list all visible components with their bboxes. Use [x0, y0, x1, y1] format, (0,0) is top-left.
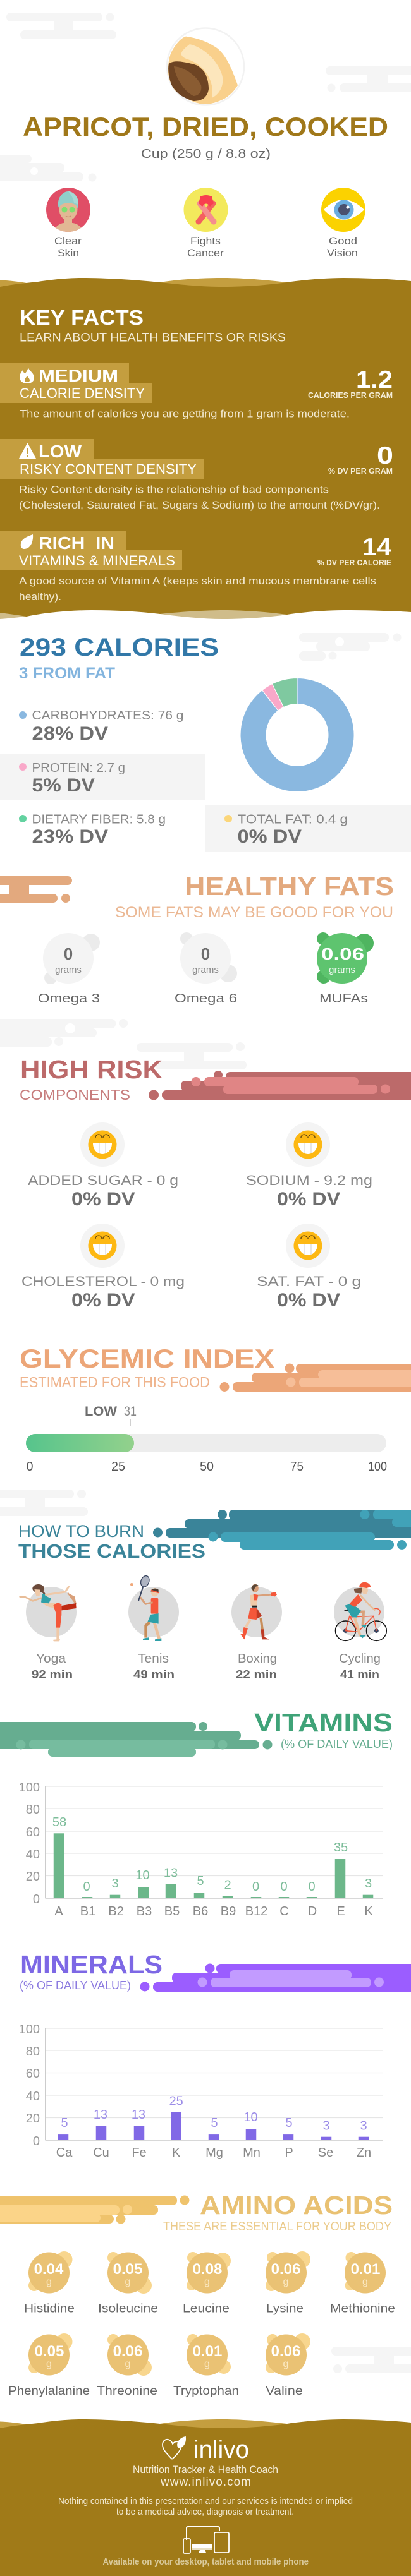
bar chart: vitamins: E — [336, 1905, 345, 1918]
fact: medium calorie density: CALORIE DENSITY — [20, 385, 145, 401]
bar chart: vitamins: B5 — [164, 1905, 180, 1918]
gauge axis: 0 — [27, 1460, 33, 1474]
heading: healthy fats: HEALTHY FATS — [185, 872, 394, 901]
item: added sugar: 0% DV — [71, 1189, 135, 1210]
benefit: fights cancer — [183, 188, 228, 259]
heading: vitamins: VITAMINS — [254, 1708, 393, 1737]
amino: valine: Valine — [266, 2385, 303, 2398]
fact: rich in vitamins and minerals: VITAMINS & MINERALS — [19, 553, 175, 569]
amino: methionine: 0.01 — [351, 2261, 380, 2278]
bar chart: vitamins: 0 — [33, 1893, 40, 1906]
item: sodium: SODIUM - 9.2 mg — [246, 1172, 372, 1188]
gauge axis: 25 — [111, 1460, 125, 1474]
bar chart: vitamins: 0 — [83, 1880, 90, 1894]
bar chart: minerals: 100 — [19, 2023, 40, 2037]
bar chart: vitamins: B1 — [80, 1905, 95, 1918]
benefit: fights cancer: Fights — [190, 235, 221, 247]
banner shape — [0, 2196, 190, 2224]
amino: leucine: 0.08 — [193, 2261, 222, 2278]
subheading: ESTIMATED FOR THIS FOOD — [20, 1374, 210, 1390]
activity: yoga — [20, 1584, 77, 1681]
amino: valine: 0.06 — [271, 2343, 300, 2360]
fact: low risky content density: RISKY CONTENT DENSITY — [20, 461, 197, 477]
amino: isoleucine: Isoleucine — [98, 2302, 158, 2316]
legend: carbohydrates: CARBOHYDRATES: 76 g — [32, 709, 183, 723]
fact: rich in vitamins and minerals: RICH IN — [39, 533, 114, 553]
bar chart: vitamins: 35 — [334, 1841, 348, 1855]
bar chart: minerals: Cu — [93, 2146, 109, 2160]
gauge marker — [85, 1404, 137, 1426]
legend: carbohydrates: 28% DV — [32, 723, 108, 744]
activity: cycling: 41 min — [340, 1668, 379, 1681]
subheading: (% OF DAILY VALUE) — [20, 1979, 131, 1992]
legend: total fat — [206, 805, 411, 852]
amino: phenylalanine — [8, 2333, 90, 2398]
fact: rich in vitamins and minerals: healthy). — [19, 591, 61, 603]
bar chart: vitamins: 3 — [365, 1877, 372, 1891]
bar chart: minerals: 60 — [26, 2067, 40, 2081]
fact: low risky content density: (Cholesterol, Saturated Fat, Sugars & Sodium) to the amount (%DV/gr). — [19, 499, 380, 511]
bar chart: vitamins: 10 — [135, 1869, 150, 1882]
activity: boxing: Boxing — [238, 1652, 277, 1666]
amino: histidine: 0.04 — [34, 2261, 64, 2278]
omega 3: Omega 3 — [38, 992, 100, 1006]
legend: protein: PROTEIN: 2.7 g — [32, 761, 125, 775]
amino: histidine: g — [46, 2277, 52, 2287]
legend: total fat: TOTAL FAT: 0.4 g — [238, 812, 348, 826]
activity: tennis: Tenis — [138, 1652, 169, 1666]
bar chart: minerals: 5 — [285, 2116, 293, 2130]
availability note: Available on your desktop, tablet and mobile phone — [102, 2556, 309, 2567]
bar chart: minerals: 25 — [169, 2095, 183, 2109]
amino: threonine: 0.06 — [113, 2343, 142, 2360]
bar chart: minerals: 5 — [61, 2116, 68, 2130]
disclaimer — [58, 2496, 353, 2517]
benefit: good vision — [321, 188, 365, 259]
banner shape — [153, 1510, 411, 1550]
amino: threonine: g — [125, 2359, 130, 2369]
fact: low risky content density: Risky Content density is the relationship of bad components — [19, 484, 329, 495]
omega 6: grams — [192, 965, 219, 975]
heading: amino acids: AMINO ACIDS — [200, 2191, 393, 2220]
bar chart: vitamins: B6 — [193, 1905, 208, 1918]
gauge axis: 100 — [368, 1460, 387, 1474]
banner shape — [149, 1071, 411, 1100]
amino: lysine: Lysine — [266, 2302, 304, 2316]
omega 6: 0 — [201, 944, 210, 963]
amino: methionine: g — [362, 2277, 368, 2287]
amino: lysine — [266, 2251, 310, 2316]
item: saturated fat: 0% DV — [277, 1290, 340, 1311]
bar chart: minerals: 3 — [360, 2119, 367, 2133]
benefit: clear skin — [46, 188, 90, 259]
amino: histidine: Histidine — [24, 2302, 75, 2316]
fact: low risky content density — [0, 439, 393, 511]
legend: dietary fiber: 23% DV — [32, 826, 108, 847]
bar chart: vitamins: D — [308, 1905, 317, 1918]
mufas: grams — [329, 965, 355, 975]
amino: tryptophan: Tryptophan — [173, 2385, 239, 2398]
amino: histidine — [24, 2251, 75, 2316]
item: cholesterol: CHOLESTEROL - 0 mg — [21, 1273, 185, 1289]
omega 6: Omega 6 — [175, 992, 237, 1006]
mufas — [317, 932, 374, 1006]
bar chart: minerals: Se — [318, 2146, 333, 2160]
bar chart: minerals: 10 — [243, 2110, 258, 2124]
fact: low risky content density: LOW — [39, 442, 82, 461]
donut chart — [240, 678, 354, 792]
item: added sugar: ADDED SUGAR - 0 g — [28, 1172, 178, 1188]
amino: isoleucine: 0.05 — [113, 2261, 142, 2278]
amino: valine — [266, 2333, 310, 2398]
food image: apricot half — [167, 28, 244, 105]
bar chart: vitamins — [19, 1781, 383, 1918]
bar chart: vitamins: 40 — [26, 1848, 40, 1862]
benefit: good vision: Good — [329, 235, 357, 247]
fact: low risky content density: % DV PER GRAM — [328, 466, 393, 476]
legend: dietary fiber: DIETARY FIBER: 5.8 g — [32, 812, 166, 826]
banner shape — [0, 876, 72, 903]
amino: phenylalanine: Phenylalanine — [8, 2385, 90, 2398]
heading: glycemic index: GLYCEMIC INDEX — [20, 1344, 274, 1373]
bar chart: minerals: 3 — [322, 2119, 330, 2133]
mufas: MUFAs — [319, 992, 368, 1006]
banner shape — [220, 1363, 411, 1392]
amino: tryptophan — [173, 2334, 239, 2398]
activity: boxing — [231, 1584, 282, 1681]
fact: rich in vitamins and minerals: % DV PER CALORIE — [317, 558, 391, 567]
omega 3: 0 — [64, 944, 73, 963]
bar chart: minerals: P — [285, 2146, 293, 2160]
activity: tennis: 49 min — [133, 1668, 175, 1681]
bar chart: minerals: Fe — [132, 2146, 147, 2160]
bar chart: vitamins: 100 — [19, 1781, 40, 1795]
bar chart: minerals: 40 — [26, 2090, 40, 2104]
amino: methionine — [330, 2252, 395, 2316]
bar chart: vitamins: 60 — [26, 1826, 40, 1839]
activity: yoga: 92 min — [32, 1668, 73, 1681]
benefit: clear skin: Skin — [58, 247, 79, 259]
fact: medium calorie density: CALORIES PER GRAM — [308, 390, 393, 400]
fact: rich in vitamins and minerals: A good source of Vitamin A (keeps skin and mucous membrane cells — [19, 575, 376, 587]
fact: medium calorie density — [0, 363, 393, 419]
benefit: fights cancer: Cancer — [187, 247, 224, 259]
gauge axis: 50 — [200, 1460, 214, 1474]
heading: minerals: MINERALS — [20, 1950, 163, 1979]
item: added sugar — [28, 1122, 178, 1210]
banner shape — [140, 1963, 411, 1992]
item: cholesterol: 0% DV — [71, 1290, 135, 1311]
amino: methionine: Methionine — [330, 2302, 395, 2316]
gauge bar — [26, 1434, 386, 1452]
amino: valine: g — [283, 2359, 288, 2369]
benefit: good vision: Vision — [327, 247, 358, 259]
subheading: (% OF DAILY VALUE) — [281, 1738, 393, 1750]
legend: dietary fiber — [19, 812, 166, 847]
bar chart: minerals: 20 — [26, 2112, 40, 2126]
fact: medium calorie density: 1.2 — [356, 366, 393, 394]
amino: isoleucine: g — [125, 2277, 130, 2287]
item: saturated fat — [257, 1224, 361, 1311]
panel: calories — [0, 634, 411, 852]
activity: tennis — [128, 1575, 179, 1681]
item: sodium: 0% DV — [277, 1189, 340, 1210]
legend: total fat: 0% DV — [238, 826, 302, 847]
panel: minerals — [19, 1950, 411, 2160]
bar chart: vitamins: 0 — [280, 1880, 288, 1894]
amino: phenylalanine: 0.05 — [35, 2343, 64, 2360]
bar chart: vitamins: 3 — [111, 1877, 119, 1891]
panel: vitamins — [0, 1708, 393, 1918]
fact: rich in vitamins and minerals — [0, 531, 391, 603]
bar chart: minerals: Zn — [357, 2146, 371, 2160]
subheading: THESE ARE ESSENTIAL FOR YOUR BODY — [163, 2220, 391, 2234]
panel: amino acids — [0, 2191, 395, 2398]
website: www.inlivo.com — [160, 2476, 251, 2489]
bar chart: vitamins: A — [54, 1905, 63, 1918]
subheading: LEARN ABOUT HEALTH BENEFITS OR RISKS — [20, 331, 286, 345]
bar chart: vitamins: B12 — [245, 1905, 267, 1918]
benefit: clear skin: Clear — [54, 235, 82, 247]
bar chart: vitamins: 13 — [164, 1866, 178, 1880]
activity: yoga: Yoga — [36, 1652, 66, 1666]
legend: carbohydrates — [19, 709, 183, 744]
bar chart: vitamins: B3 — [137, 1905, 152, 1918]
legend: protein: 5% DV — [32, 775, 95, 796]
amino: leucine: Leucine — [183, 2302, 230, 2316]
bar chart: vitamins: 0 — [252, 1880, 259, 1894]
activity: boxing: 22 min — [236, 1668, 277, 1681]
amino: phenylalanine: g — [46, 2359, 52, 2369]
bar chart: minerals: 5 — [211, 2116, 218, 2130]
bar chart: minerals — [19, 2023, 383, 2160]
bar chart: vitamins: B9 — [221, 1905, 236, 1918]
gauge axis — [27, 1460, 387, 1474]
bar chart: vitamins: 80 — [26, 1803, 40, 1817]
subheading: COMPONENTS — [20, 1086, 130, 1103]
bar chart: minerals: K — [172, 2146, 181, 2160]
panel: how to burn those calories — [18, 1510, 411, 1681]
bar chart: minerals: Mn — [243, 2146, 261, 2160]
amino: leucine — [183, 2252, 231, 2316]
amino: leucine: g — [204, 2277, 210, 2287]
heading: high risk: HIGH RISK — [20, 1055, 163, 1084]
bar chart: minerals: 0 — [33, 2134, 40, 2148]
gauge axis: 75 — [290, 1460, 304, 1474]
bar chart: vitamins: 2 — [224, 1879, 231, 1893]
mufas: 0.06 — [321, 944, 364, 963]
fact: medium calorie density: The amount of calories you are getting from 1 gram is moderate. — [20, 408, 350, 419]
banner shape — [0, 1722, 272, 1757]
fact: low risky content density: 0 — [377, 442, 393, 469]
disclaimer: to be a medical advice, diagnosis or treatment. — [116, 2507, 294, 2517]
panel: key facts — [0, 278, 411, 627]
item: cholesterol — [21, 1224, 185, 1311]
icon: devices — [183, 2527, 229, 2553]
panel: glycemic index — [20, 1344, 411, 1474]
subheading: from fat: 3 FROM FAT — [19, 665, 115, 682]
panel: healthy fats — [0, 872, 394, 1006]
bar chart: vitamins: 58 — [52, 1815, 66, 1829]
amino: isoleucine — [98, 2252, 158, 2316]
heading: calories: 293 CALORIES — [20, 634, 219, 661]
bar chart: vitamins: B2 — [108, 1905, 124, 1918]
amino: lysine: g — [283, 2277, 288, 2287]
item: saturated fat: SAT. FAT - 0 g — [257, 1273, 361, 1289]
activity: cycling: Cycling — [339, 1652, 381, 1666]
bar chart: minerals: 13 — [94, 2108, 107, 2122]
bar chart: minerals: 80 — [26, 2045, 40, 2059]
panel: high risk components — [20, 1055, 411, 1311]
bar chart: vitamins: 20 — [26, 1870, 40, 1884]
gauge marker: LOW — [85, 1404, 117, 1419]
bar chart: minerals: Ca — [56, 2146, 73, 2160]
logo: wordmark: inlivo — [193, 2436, 249, 2464]
bar chart: vitamins: 0 — [308, 1880, 316, 1894]
heading: those calories: THOSE CALORIES — [18, 1540, 206, 1562]
subheading: SOME FATS MAY BE GOOD FOR YOU — [115, 904, 393, 921]
bar chart: minerals: Mg — [206, 2146, 223, 2160]
serving size: Cup (250 g / 8.8 oz) — [141, 147, 271, 161]
amino: tryptophan: g — [204, 2359, 210, 2369]
disclaimer: Nothing contained in this presentation and our services is intended or implied — [58, 2496, 353, 2507]
bar chart: vitamins: C — [279, 1905, 289, 1918]
tagline: Nutrition Tracker & Health Coach — [133, 2464, 278, 2476]
bar chart: vitamins: 5 — [197, 1874, 204, 1888]
legend: protein — [0, 754, 206, 800]
bar chart: vitamins: K — [364, 1905, 373, 1918]
omega 6 — [175, 932, 237, 1006]
activity: cycling — [334, 1582, 386, 1681]
amino: threonine: Threonine — [97, 2385, 157, 2398]
fact: medium calorie density: MEDIUM — [39, 366, 118, 385]
omega 3: grams — [55, 965, 82, 975]
footer — [0, 2419, 411, 2576]
title: APRICOT, DRIED, COOKED — [23, 112, 388, 141]
gauge marker: 31 — [124, 1404, 137, 1419]
omega 3 — [38, 933, 100, 1006]
heading: key facts: KEY FACTS — [20, 306, 144, 329]
amino: tryptophan: 0.01 — [193, 2343, 222, 2360]
heading: how to burn: HOW TO BURN — [18, 1522, 144, 1541]
fact: rich in vitamins and minerals: 14 — [362, 534, 391, 561]
amino: lysine: 0.06 — [271, 2261, 300, 2278]
item: sodium — [246, 1122, 372, 1210]
logo: heart and leaf — [163, 2437, 185, 2459]
bar chart: minerals: 13 — [132, 2108, 145, 2122]
amino: threonine — [97, 2334, 157, 2398]
